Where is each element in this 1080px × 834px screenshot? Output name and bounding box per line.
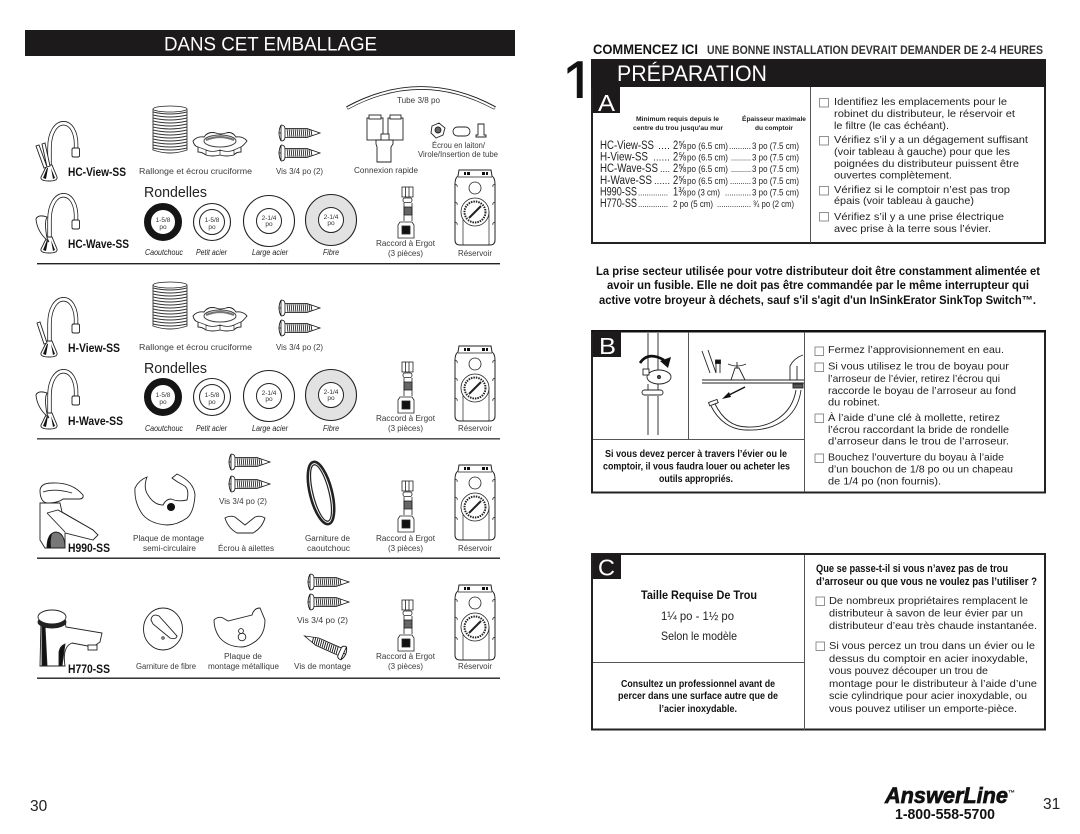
washers: 2-1/4 bbox=[262, 215, 277, 222]
label: mounting screw: Vis de montage bbox=[294, 662, 352, 671]
icon: HC-Wave-SS faucet bbox=[36, 195, 80, 253]
clearance table: 2⅝ bbox=[673, 175, 686, 187]
label: hose and nut: Rallonge et écrou cruciforme bbox=[139, 167, 253, 176]
icon: rubber gasket bbox=[303, 459, 339, 527]
note: consult a professional bbox=[618, 679, 778, 715]
checklist C: vous pouvez découper un trou de bbox=[829, 665, 988, 677]
clearance table: 3 po (7.5 cm) bbox=[752, 188, 799, 198]
panel: HC-View-SS and HC-Wave-SS kit bbox=[36, 88, 499, 258]
table headers: Épaisseur maximale bbox=[742, 114, 806, 123]
washers: 1-5/8 bbox=[205, 392, 220, 399]
clearance table: .... bbox=[658, 141, 670, 151]
checklist C: De nombreux propriétaires remplacent le bbox=[829, 595, 1028, 607]
checklist C: vous pouvez utiliser un emporte-pièce. bbox=[829, 703, 1017, 715]
step number: 1 bbox=[562, 49, 595, 116]
label: reservoir: Réservoir bbox=[458, 424, 492, 433]
clearance table: po (6.5 cm) bbox=[687, 152, 728, 162]
notice: power outlet warning bbox=[596, 266, 1040, 307]
checklist A: robinet du distributeur, le réservoir et bbox=[834, 108, 1015, 120]
icon: raccord bbox=[398, 362, 414, 413]
washer labels: Petit acier bbox=[196, 424, 227, 433]
washers: po bbox=[327, 395, 335, 402]
title: dans cet emballage bbox=[25, 30, 515, 56]
checklist B: raccorde le boyau de l’arroseur au fond bbox=[828, 385, 1016, 397]
icon: screws bbox=[278, 125, 320, 161]
icon: reservoir bbox=[455, 170, 495, 245]
model name: H770-SS: H770-SS bbox=[68, 662, 110, 676]
heading: rondelles: Rondelles bbox=[144, 360, 207, 377]
label: raccord bbox=[376, 239, 436, 258]
logo: AnswerLine: ™ bbox=[1008, 790, 1015, 797]
checklist B: du robinet. bbox=[828, 396, 880, 408]
checklist C: distributeur d’eau très chaude instantanée. bbox=[829, 620, 1037, 632]
washer labels: Fibre bbox=[323, 424, 339, 433]
logo: AnswerLine bbox=[884, 783, 1015, 823]
icon: reservoir bbox=[455, 585, 495, 660]
label: reservoir: Réservoir bbox=[458, 544, 492, 553]
model name: H-View-SS: H-View-SS bbox=[68, 341, 120, 355]
note: consult a professional: Consultez un professionnel avant de bbox=[621, 679, 775, 690]
label: reservoir: Réservoir bbox=[458, 662, 492, 671]
clearance table: 3 po (7.5 cm) bbox=[752, 141, 799, 151]
clearance table: .......... bbox=[731, 164, 751, 174]
icon: cross nut bbox=[193, 132, 247, 156]
label: screws: Vis 3/4 po (2) bbox=[276, 343, 323, 352]
icon: reservoir bbox=[455, 465, 495, 540]
label: rubber gasket bbox=[305, 534, 351, 553]
icon: fibre gasket bbox=[144, 608, 182, 650]
model name: HC-Wave-SS: HC-Wave-SS bbox=[68, 237, 129, 251]
question heading: d’arroseur ou que vous ne voulez pas l’utiliser ? bbox=[816, 576, 1037, 588]
checklist B: Bouchez l’ouverture du boyau à l’aide bbox=[828, 452, 1004, 464]
washer labels: Large acier bbox=[252, 248, 288, 257]
tab: B: B bbox=[599, 333, 616, 359]
checklist B: Fermez l’approvisionnement en eau. bbox=[828, 344, 1004, 356]
label: semicircular plate: Plaque de montage bbox=[133, 534, 205, 543]
washers: po bbox=[159, 399, 167, 406]
checklist B: d’arroseur dans le trou de l’arroseur. bbox=[828, 436, 1009, 448]
washers: 2-1/4 bbox=[324, 389, 339, 396]
clearance table bbox=[600, 140, 799, 210]
icon: quick connect bbox=[367, 115, 403, 162]
clearance table: .......... bbox=[729, 141, 751, 151]
panel: H990-SS kit bbox=[40, 454, 495, 555]
label: raccord: (3 pièces) bbox=[388, 424, 423, 433]
clearance table: ...... bbox=[654, 176, 670, 186]
tab: A: A bbox=[598, 90, 616, 116]
checklist C: distributeur à savon de leur évier par un bbox=[829, 608, 1023, 620]
clearance table: H770-SS bbox=[600, 198, 637, 210]
tab: C: C bbox=[598, 554, 615, 580]
label: brass nut bbox=[418, 141, 499, 159]
icon: metal plate bbox=[214, 608, 265, 647]
notice: power outlet warning: La prise secteur utilisée pour votre distributeur doit être constamment alimentée et bbox=[596, 266, 1040, 278]
clearance table: .......... bbox=[731, 152, 751, 162]
checklist A: Vérifiez s’il y a un dégagement suffisant bbox=[834, 134, 1028, 146]
heading: commencez ici: UNE BONNE INSTALLATION DEVRAIT DEMANDER DE 2-4 HEURES bbox=[707, 43, 1043, 57]
tab: B bbox=[593, 331, 621, 359]
label: raccord: (3 pièces) bbox=[388, 249, 423, 258]
clearance table: 3 po (7.5 cm) bbox=[752, 164, 799, 174]
label: brass nut: Virole/Insertion de tube bbox=[418, 150, 499, 159]
label: tube: Tube 3/8 po bbox=[397, 96, 441, 105]
header bar: préparation: PRÉPARATION bbox=[617, 61, 767, 86]
washers: 1-5/8 bbox=[156, 217, 171, 224]
hole size: 1¼ po - 1½ po bbox=[661, 609, 734, 623]
note: consult a professional: percer dans une surface autre que de bbox=[618, 691, 778, 702]
illustration: shutoff valve bbox=[640, 333, 671, 435]
table headers: du comptoir bbox=[755, 125, 793, 132]
checklist B: d’un bouchon de 1/8 po ou un chapeau bbox=[828, 464, 1013, 476]
label: screws: Vis 3/4 po (2) bbox=[276, 167, 323, 176]
icon: raccord bbox=[398, 600, 414, 651]
label: raccord: Raccord à Ergot bbox=[376, 239, 436, 248]
label: raccord bbox=[376, 652, 436, 671]
label: screws: Vis 3/4 po (2) bbox=[297, 616, 348, 625]
clearance table: 3 po (7.5 cm) bbox=[752, 176, 799, 186]
clearance table: 2⅝ bbox=[673, 163, 686, 175]
label: metal plate bbox=[208, 652, 280, 671]
label: raccord: Raccord à Ergot bbox=[376, 414, 436, 423]
checklist B bbox=[815, 344, 1016, 488]
question heading: Que se passe-t-il si vous n’avez pas de trou bbox=[816, 563, 1008, 575]
washers: 2-1/4 bbox=[262, 390, 277, 397]
checklist A: le filtre (le cas échéant). bbox=[834, 120, 949, 132]
note: drilling tools bbox=[603, 449, 790, 485]
panel: H-View-SS and H-Wave-SS kit bbox=[36, 282, 495, 433]
washer labels bbox=[145, 424, 339, 433]
checklist B: l’écrou raccordant la bride de rondelle bbox=[828, 424, 1009, 436]
icon: extension hose bbox=[153, 282, 187, 329]
label: screws: Vis 3/4 po (2) bbox=[219, 497, 267, 506]
label: semicircular plate bbox=[133, 534, 205, 553]
washers: 2-1/4 bbox=[324, 214, 339, 221]
clearance table: H990-SS bbox=[600, 186, 637, 198]
header bar: préparation bbox=[591, 60, 1046, 87]
icon: HC-View-SS faucet bbox=[36, 123, 80, 181]
icon: H990-SS faucet bbox=[40, 483, 98, 548]
label: raccord: Raccord à Ergot bbox=[376, 534, 436, 543]
model name: H-Wave-SS: H-Wave-SS bbox=[68, 414, 123, 428]
icon: H-Wave-SS faucet bbox=[36, 371, 80, 429]
clearance table: .............. bbox=[638, 188, 668, 198]
checklist A: avec prise à la terre sous l’évier. bbox=[834, 223, 991, 235]
clearance table: ................ bbox=[717, 199, 751, 209]
clearance table: ............ bbox=[725, 188, 751, 198]
checklist A: épais (voir tableau à gauche) bbox=[834, 195, 974, 207]
checklist A: Identifiez les emplacements pour le bbox=[834, 96, 1007, 108]
icon: screws bbox=[278, 300, 320, 336]
clearance table: HC-Wave-SS bbox=[600, 163, 658, 175]
icon: raccord bbox=[398, 187, 414, 238]
icon: extension hose bbox=[153, 106, 187, 153]
washers: po bbox=[265, 221, 273, 228]
icon: brass nut ferrule insert bbox=[431, 123, 486, 138]
icon: screws bbox=[228, 454, 270, 492]
label: raccord: Raccord à Ergot bbox=[376, 652, 436, 661]
icon: semicircular plate bbox=[135, 474, 195, 525]
label: hose and nut: Rallonge et écrou cruciforme bbox=[139, 343, 253, 352]
clearance table: po (6.5 cm) bbox=[687, 141, 728, 151]
icon: tube bbox=[347, 88, 495, 108]
label: quick connect: Connexion rapide bbox=[354, 166, 419, 175]
checklist B: l’arroseur de l’évier, retirez l’écrou qui bbox=[828, 373, 1000, 385]
clearance table: 1⅜ bbox=[673, 186, 686, 198]
notice: power outlet warning: avoir un fusible. Elle ne doit pas être commandée par le même interrupteur qui bbox=[607, 280, 1029, 292]
checklist C: Si vous percez un trou dans un évier ou le bbox=[829, 640, 1035, 652]
washer labels: Large acier bbox=[252, 424, 288, 433]
washer labels: Petit acier bbox=[196, 248, 227, 257]
panel: C bbox=[592, 554, 1045, 730]
clearance table: 3 po (7.5 cm) bbox=[752, 152, 799, 162]
table headers: centre du trou jusqu'au mur bbox=[633, 125, 723, 132]
hole size: Selon le modèle bbox=[661, 629, 737, 643]
logo: AnswerLine: 1-800-558-5700 bbox=[895, 807, 995, 823]
tab: C bbox=[593, 554, 621, 580]
label: fibre gasket: Garniture de fibre bbox=[136, 662, 197, 671]
icon: H-View-SS faucet bbox=[37, 299, 80, 357]
washer labels: Fibre bbox=[323, 248, 339, 257]
clearance table: H-Wave-SS bbox=[600, 175, 652, 187]
checklist C: scie cylindrique pour acier inoxydable, ou bbox=[829, 690, 1027, 702]
clearance table: 2⅝ bbox=[673, 152, 686, 164]
icon: reservoir bbox=[455, 346, 495, 421]
checklist C: montage pour le distributeur à l’aide d’une bbox=[829, 678, 1037, 690]
washers bbox=[148, 370, 356, 422]
checklist C bbox=[816, 595, 1037, 715]
washers: po bbox=[208, 224, 216, 231]
clearance table: po (6.5 cm) bbox=[687, 176, 728, 186]
icon: mounting screw bbox=[301, 629, 349, 661]
checklist C: dessus du comptoir en acier inoxydable, bbox=[829, 653, 1028, 665]
washer labels: Caoutchouc bbox=[145, 424, 183, 433]
note: drilling tools: comptoir, il vous faudra louer ou acheter les bbox=[603, 462, 790, 472]
clearance table: .... bbox=[660, 164, 670, 174]
checklist B: À l’aide d’une clé à mollette, retirez bbox=[828, 411, 1000, 424]
panel: H770-SS kit bbox=[38, 574, 495, 676]
clearance table: 2⅝ bbox=[673, 140, 686, 152]
table headers bbox=[633, 114, 806, 132]
page number left: 30 bbox=[30, 798, 48, 815]
label: brass nut: Écrou en laiton/ bbox=[432, 141, 486, 150]
tab: A bbox=[593, 86, 620, 116]
checklist B: Si vous utilisez le trou de boyau pour bbox=[828, 360, 1010, 372]
question heading bbox=[816, 563, 1037, 588]
label: metal plate: montage métallique bbox=[208, 662, 280, 671]
clearance table: po (3 cm) bbox=[687, 188, 720, 198]
model name: HC-View-SS: HC-View-SS bbox=[68, 165, 126, 179]
illustration: sprayer hose removal bbox=[702, 350, 804, 430]
note: drilling tools: outils appropriés. bbox=[659, 474, 733, 485]
washers: 1-5/8 bbox=[156, 392, 171, 399]
clearance table: H-View-SS bbox=[600, 152, 648, 164]
checklist A: Vérifiez si le comptoir n’est pas trop bbox=[834, 184, 1010, 196]
label: rubber gasket: Garniture de bbox=[305, 534, 351, 543]
page number right: 31 bbox=[1043, 796, 1060, 813]
clearance table: ¾ po (2 cm) bbox=[753, 199, 794, 209]
washers: po bbox=[208, 399, 216, 406]
clearance table: ...... bbox=[653, 152, 670, 162]
checklist A bbox=[820, 96, 1028, 235]
panel: B bbox=[592, 330, 1046, 492]
panel: A preparation bbox=[591, 60, 1046, 243]
washers: 1-5/8 bbox=[205, 217, 220, 224]
label: raccord bbox=[376, 534, 436, 553]
label: raccord bbox=[376, 414, 436, 433]
label: raccord: (3 pièces) bbox=[388, 662, 423, 671]
label: rubber gasket: caoutchouc bbox=[307, 544, 350, 553]
label: wing nut: Écrou à ailettes bbox=[218, 544, 274, 553]
clearance table: po (6.5 cm) bbox=[687, 164, 728, 174]
note: consult a professional: l’acier inoxydable. bbox=[659, 704, 737, 715]
washer labels bbox=[145, 248, 339, 257]
clearance table: HC-View-SS bbox=[600, 140, 654, 152]
label: semicircular plate: semi-circulaire bbox=[143, 544, 197, 553]
washer labels: Caoutchouc bbox=[145, 248, 183, 257]
checklist B: de 1/4 po (non fournis). bbox=[828, 476, 941, 488]
title: dans cet emballage: DANS CET EMBALLAGE bbox=[164, 34, 377, 56]
icon: screws bbox=[308, 574, 349, 610]
washers: po bbox=[159, 224, 167, 231]
heading: rondelles: Rondelles bbox=[144, 184, 207, 201]
checklist A: Vérifiez s’il y a une prise électrique bbox=[834, 211, 1004, 223]
washers: po bbox=[327, 220, 335, 227]
heading: commencez ici bbox=[593, 42, 1043, 57]
hole size: Taille Requise De Trou bbox=[641, 588, 757, 602]
icon: wing nut bbox=[225, 516, 265, 533]
label: metal plate: Plaque de bbox=[224, 652, 263, 661]
washers bbox=[148, 194, 356, 246]
hole size bbox=[641, 588, 757, 643]
clearance table: .......... bbox=[730, 176, 751, 186]
icon: cross nut bbox=[193, 308, 247, 331]
checklist A: ouvertes complètement. bbox=[834, 170, 952, 182]
logo: AnswerLine: AnswerLine bbox=[884, 783, 1008, 808]
model name: H990-SS: H990-SS bbox=[68, 541, 110, 555]
label: raccord: (3 pièces) bbox=[388, 544, 423, 553]
notice: power outlet warning: active votre broyeur à déchets, sauf s'il s'agit d'un InSinkErator SinkTop Switch™. bbox=[599, 295, 1036, 307]
checklist A: poignées du distributeur puissent être bbox=[834, 158, 1019, 170]
note: drilling tools: Si vous devez percer à travers l’évier ou le bbox=[605, 449, 787, 460]
label: reservoir: Réservoir bbox=[458, 249, 492, 258]
clearance table: .............. bbox=[638, 199, 668, 209]
heading: commencez ici: COMMENCEZ ICI bbox=[593, 42, 698, 57]
clearance table: 2 po (5 cm) bbox=[673, 199, 713, 209]
checklist A: (voir tableau à gauche) pour que les bbox=[834, 146, 1010, 158]
icon: raccord bbox=[398, 481, 414, 532]
table headers: Minimum requis depuis le bbox=[636, 116, 719, 123]
washers: po bbox=[265, 396, 273, 403]
icon: H770-SS faucet bbox=[38, 610, 102, 666]
